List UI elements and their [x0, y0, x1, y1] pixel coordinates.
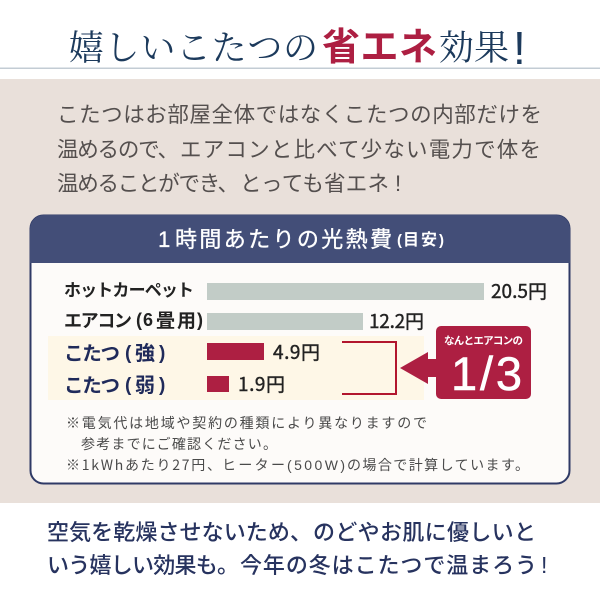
card header: 目安 — [403, 226, 437, 250]
card header: ( — [397, 232, 402, 249]
callout: one third: 1/3 — [451, 347, 522, 400]
bar: kotatsu strong — [64, 337, 320, 366]
closing text: ! — [541, 552, 547, 578]
title: ! — [513, 22, 526, 74]
callout: one third — [400, 326, 531, 400]
callout: one third: なんとエアコンの — [444, 333, 523, 348]
bracket — [342, 342, 396, 394]
closing text — [47, 515, 547, 580]
bar: kotatsu weak: 1.9円 — [238, 370, 285, 397]
bar: kotatsu strong: 強 — [135, 337, 155, 366]
bar: hot carpet: ホットカーペット — [64, 276, 194, 301]
title: 嬉しいこたつの — [69, 29, 318, 68]
footnotes: ※1kWhあたり27円、 — [66, 455, 221, 475]
intro text: とっても省エネ — [240, 167, 389, 198]
card header — [30, 215, 570, 263]
intro text — [57, 98, 542, 198]
footnotes: (500W) — [287, 457, 345, 473]
card header: 時間あたりの光熱費 — [175, 222, 392, 254]
closing text: 今年の冬はこたつで温まろう — [240, 548, 537, 580]
bar: kotatsu strong: ( — [125, 343, 132, 364]
bar: air conditioner: 12.2円 — [369, 307, 424, 334]
bar: air conditioner: ) — [197, 310, 203, 330]
closing text: 空気を乾燥させないため、 — [47, 515, 312, 547]
bar: kotatsu strong: こたつ — [64, 337, 120, 366]
bar: kotatsu weak: こたつ — [64, 369, 120, 398]
closing text: のどやお肌に優しいと — [313, 515, 536, 547]
bar: kotatsu weak: ( — [125, 375, 132, 396]
highlight band — [48, 336, 424, 400]
intro text: エアコンと比べて少ない電力で体を — [180, 133, 541, 164]
footnotes: の場合で計算しています。 — [347, 455, 529, 475]
intro text: ! — [395, 171, 401, 196]
intro text: 温めることができ、 — [57, 167, 239, 198]
bar: air conditioner: エアコン — [64, 307, 132, 333]
bar: air conditioner: 6 — [143, 310, 153, 330]
bar: kotatsu strong: ) — [159, 343, 165, 364]
intro text: 温めるので、 — [57, 133, 179, 164]
bar: air conditioner — [64, 306, 424, 334]
bar: hot carpet: 20.5円 — [491, 277, 547, 304]
footnotes: ヒーター — [222, 455, 285, 475]
bar: kotatsu strong: 4.9円 — [273, 338, 320, 365]
title — [69, 16, 526, 74]
footnotes — [66, 413, 529, 475]
bar: kotatsu weak: ) — [159, 375, 165, 396]
footnotes: 参考までにご確認ください。 — [81, 434, 277, 454]
bar: kotatsu weak: 弱 — [135, 369, 155, 398]
panel: cost card — [30, 215, 570, 484]
intro text: こたつはお部屋全体ではなくこたつの内部だけを — [57, 98, 542, 129]
card header: ) — [439, 232, 444, 249]
arrow — [400, 352, 440, 384]
bar: hot carpet — [64, 276, 547, 304]
title: 効果 — [439, 29, 509, 68]
bar: air conditioner: ( — [136, 310, 142, 330]
footnotes: ※電気代は地域や契約の種類により異なりますので — [66, 413, 427, 433]
bar: air conditioner: 畳用 — [156, 306, 196, 333]
title: 省エネ — [322, 16, 437, 71]
card header: 1 — [158, 227, 170, 252]
closing text: いう嬉しい効果も。 — [47, 548, 239, 580]
panel: beige background — [0, 79, 600, 503]
bar: kotatsu weak — [64, 369, 285, 398]
